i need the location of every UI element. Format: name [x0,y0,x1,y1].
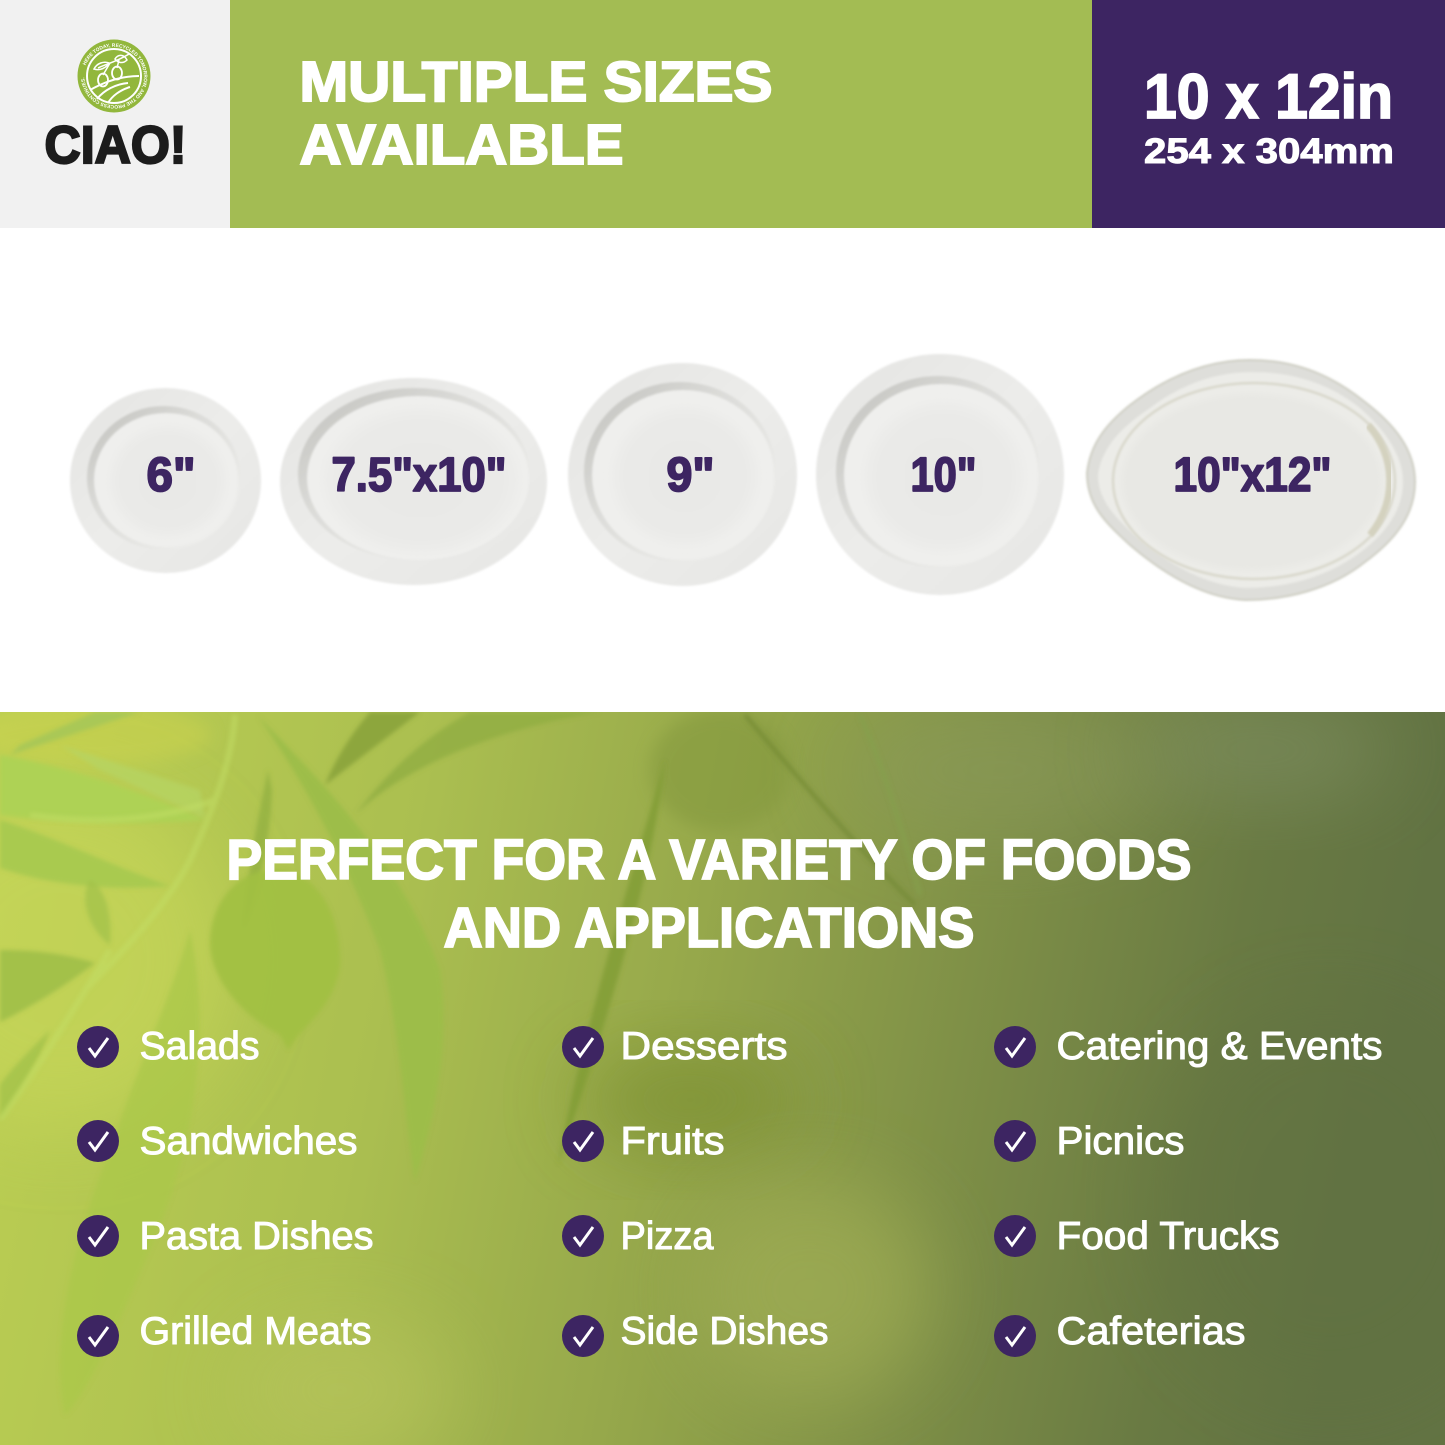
plate: 6 inch [70,388,261,573]
heading [300,50,772,177]
lower panel: foods and applications [0,700,1445,1445]
plate: 10 x 12 inch [1087,360,1415,600]
item: Salads [77,1025,260,1068]
list column: foods [77,1025,374,1357]
size in inches: 10 x 12in [1144,62,1393,132]
header: purple size panel [1092,0,1445,228]
item: Salads: Salads [140,1025,260,1068]
item: Desserts [562,1025,788,1068]
list column: dishes [562,1025,828,1357]
section heading: PERFECT FOR A VARIETY OF FOODS [226,828,1192,892]
plate: 9 inch: 9" [666,449,714,502]
item: Desserts: Desserts [620,1025,788,1068]
item: Fruits [562,1120,724,1163]
plate: 10 x 12 inch: 10"x12" [1174,449,1332,502]
plate: 6 inch: 6" [146,449,196,502]
plate: 7.5 x 10 inch [280,378,547,585]
icon: Ciao round badge: HERE TODAY, RECYCLED TOMORROW, AND THE PROCESS CONTINUES. [81,43,148,109]
item: Cafeterias: Cafeterias [1056,1310,1246,1353]
header: logo panel [0,0,230,228]
background: blurred olive branch [0,700,1445,1445]
plate: 10 inch [816,354,1064,595]
plate: 9 inch [568,363,797,586]
heading: AVAILABLE [300,113,624,177]
plate: 10 inch: 10" [910,449,976,502]
item: Pasta Dishes: Pasta Dishes [140,1215,374,1258]
item: Sandwiches: Sandwiches [140,1120,358,1163]
plates row [70,354,1415,600]
section heading: AND APPLICATIONS [444,896,974,960]
item: Pizza: Pizza [620,1215,714,1258]
item: Fruits: Fruits [620,1120,724,1163]
section heading [226,828,1192,960]
item: Side Dishes: Side Dishes [620,1310,828,1353]
item: Picnics [994,1120,1184,1163]
item: Food Trucks: Food Trucks [1056,1215,1280,1258]
item: Cafeterias [994,1310,1246,1357]
heading: MULTIPLE SIZES [300,50,772,114]
list column: applications [994,1025,1382,1357]
size in millimetres: 254 x 304mm [1144,132,1394,171]
olive fruit [210,870,340,1050]
plate: 7.5 x 10 inch: 7.5"x10" [332,449,506,502]
header: green title panel [230,0,1092,228]
item: Pizza [562,1215,714,1258]
item: Catering & Events: Catering & Events [1056,1025,1382,1068]
logo wordmark: CIAO! [44,116,186,175]
item: Picnics: Picnics [1056,1120,1184,1163]
item: Grilled Meats: Grilled Meats [140,1310,372,1353]
